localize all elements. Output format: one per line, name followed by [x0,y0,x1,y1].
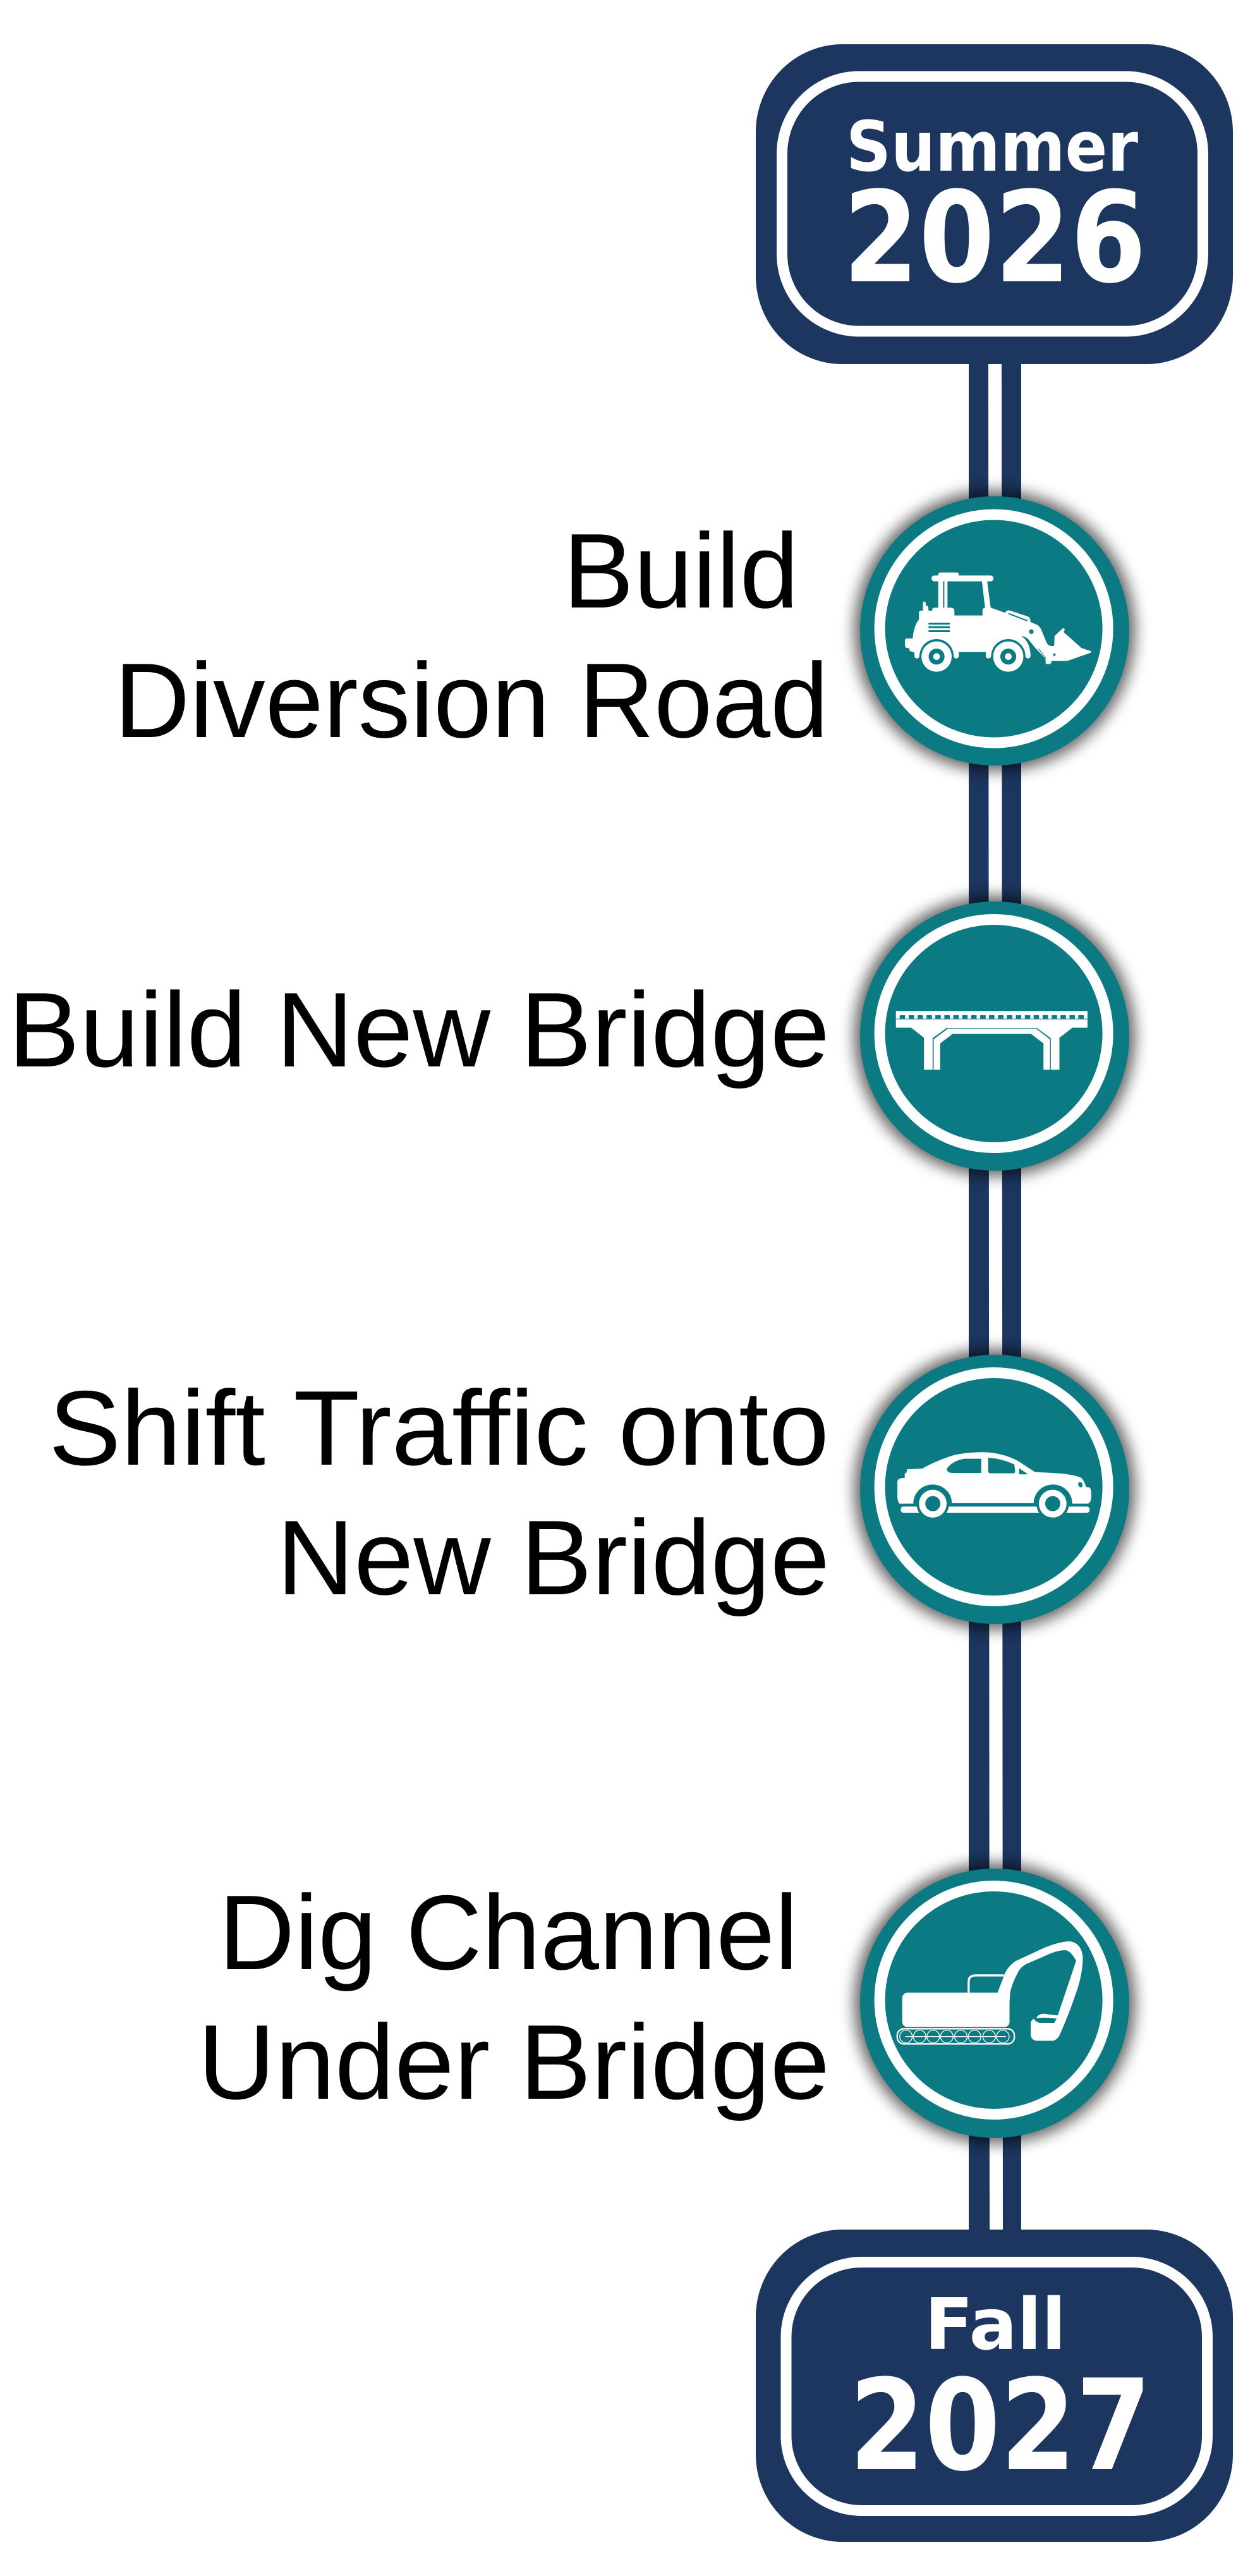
icon: car [897,1452,1091,1520]
icon: excavator [897,1941,1083,2044]
step 4 badge circle [854,1863,1135,2144]
step 2: build new bridge [8,896,1135,1176]
step 1 label: Diversion Road [114,641,828,760]
step 1 badge circle [854,491,1135,771]
icon: wheel loader [905,573,1091,672]
heading: Summer: Summer [846,106,1138,187]
step 3 label: New Bridge [277,1498,830,1617]
step 3 badge circle [854,1349,1135,1630]
step 1 label: Build [563,511,799,630]
heading: Fall: Fall [925,2284,1066,2366]
step 4: dig channel [198,1863,1135,2144]
heading: 2026: 2026 [843,164,1146,311]
timeline stem [969,354,1021,2238]
end badge: Fall 2027 [756,2230,1233,2542]
step 4 label: Dig Channel [219,1873,798,1992]
step 2 badge circle [854,896,1135,1176]
start badge: Summer 2026 [756,44,1233,364]
step 2 label: Build New Bridge [8,970,830,1089]
step 1 label [114,511,828,760]
step 4 label: Under Bridge [198,2003,830,2121]
icon: bridge [896,1011,1088,1070]
step 4 label [198,1873,830,2121]
step 3 label [49,1369,830,1617]
step 3 label: Shift Traffic onto [49,1369,829,1487]
heading: 2027: 2027 [849,2352,1151,2499]
step 1: build diversion road [114,491,1135,771]
step 3: shift traffic [49,1349,1135,1630]
